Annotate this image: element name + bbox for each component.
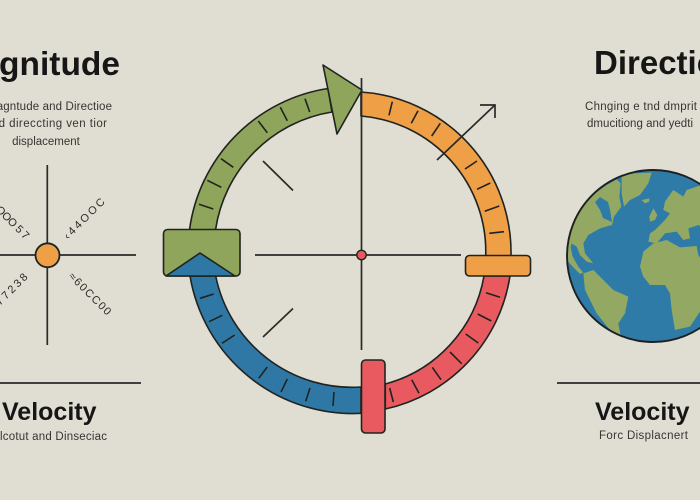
text block: right velocity caption: Forc Displacnert (599, 430, 689, 442)
box: green junction with blue triangle (164, 230, 240, 276)
spoke: lower left (263, 308, 293, 337)
arrow: diagonal vector (437, 105, 495, 160)
icon: earth globe (565, 170, 700, 342)
panel: magnitude (0, 46, 141, 443)
segment: orange arc (361, 92, 511, 256)
land: greenland (622, 173, 652, 207)
chart: magnitude axes with centre point: ≈ 6 0 C C 0 0 (66, 271, 113, 318)
text block: left velocity caption: lcotut and Dinseciac (0, 431, 107, 443)
heading: left velocity: Velocity (2, 398, 97, 426)
land: british isles (649, 208, 657, 222)
panel: direction (557, 44, 700, 442)
segment: blue arc (190, 276, 361, 414)
water: hudson bay (595, 197, 612, 222)
segment: green arc with arrowhead (190, 65, 362, 230)
land: eurasia (648, 183, 700, 243)
land: africa (640, 240, 700, 330)
chart: circular cycle diagram (164, 65, 530, 433)
centre point (357, 250, 366, 260)
land: south america (583, 270, 628, 336)
land: north america (565, 179, 621, 274)
segment: red arc (385, 276, 510, 409)
divider: left rule (0, 382, 141, 384)
text block: direction description: dmucitiong and yedti (587, 118, 693, 130)
heading: right velocity: Velocity (595, 398, 690, 426)
chart: magnitude axes with centre point: ‹ 4 4 O O C (62, 196, 108, 242)
box: red junction (362, 360, 385, 433)
text block: magnitude description: displacement (12, 136, 81, 148)
chart: magnitude axes with centre point (0, 165, 136, 345)
spoke: upper left (263, 161, 293, 190)
crosshair horizontal axis (255, 254, 461, 256)
land: iceland (642, 198, 649, 203)
box: orange junction (466, 256, 530, 276)
text block: direction description: Chnging e tnd dmprit (585, 101, 698, 113)
text block: direction description (585, 101, 698, 130)
divider: right rule (557, 382, 700, 384)
text block: magnitude description (0, 101, 112, 148)
crosshair vertical axis (360, 78, 362, 350)
